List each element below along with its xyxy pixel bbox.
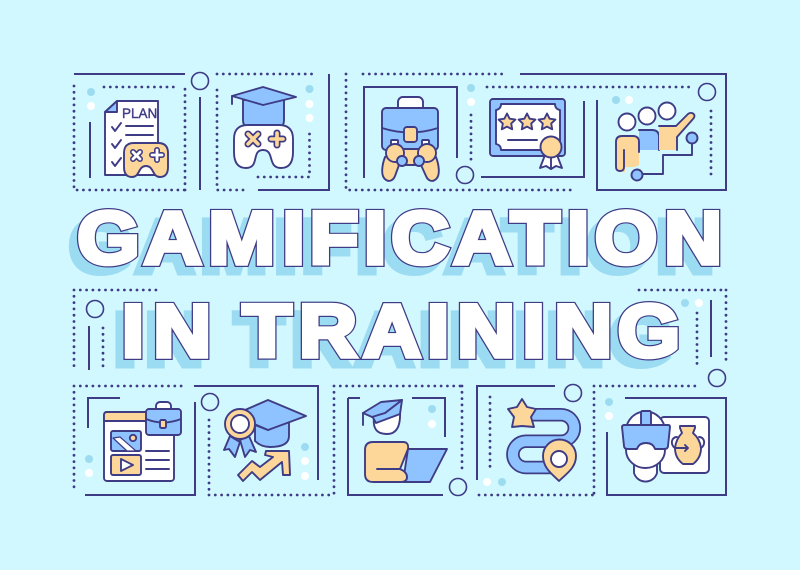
plan label: PLAN [122, 106, 157, 121]
title outline: GAMIFICATION [77, 197, 722, 280]
title outline [77, 197, 722, 373]
icon: briefcase with joystick [382, 97, 439, 181]
title lettering: IN TRAINING [122, 290, 680, 373]
icon: diploma seal, cap and growth arrow [224, 400, 306, 481]
icon: virtual reality headset and vase [622, 411, 709, 482]
icon: winding road with star and location pin [508, 399, 576, 481]
icon: team with instructor and path [616, 102, 698, 180]
icon: browser with media and briefcase [104, 402, 181, 481]
title: gamification in training [69, 197, 722, 381]
title outline: IN TRAINING [122, 290, 680, 373]
title lettering: GAMIFICATION [77, 197, 722, 280]
icon: certificate with three stars [490, 99, 565, 169]
icon: plan document with gamepad [105, 101, 168, 177]
icon: graduation cap on gamepad [232, 87, 296, 168]
title shadow: IN TRAINING [114, 299, 672, 381]
title shadow: GAMIFICATION [69, 206, 714, 288]
icon: student at laptop [363, 400, 447, 482]
title shadow [69, 206, 714, 381]
title lettering [77, 197, 722, 373]
